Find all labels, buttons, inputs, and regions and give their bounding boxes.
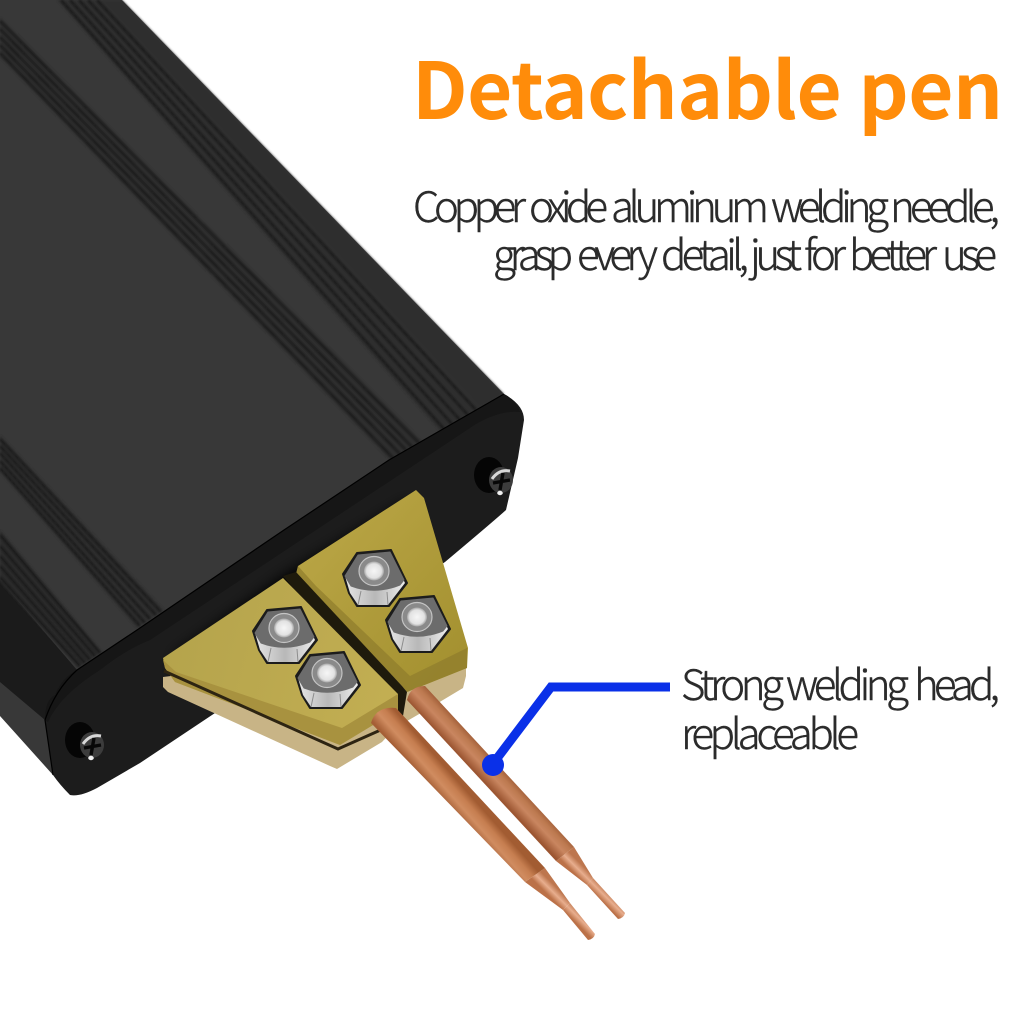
description text: welding	[771, 174, 889, 235]
description text: use	[942, 222, 997, 283]
gap between plates	[283, 572, 407, 716]
description text	[413, 174, 1000, 283]
copper welding needle right	[407, 686, 625, 919]
description text: Copper	[413, 174, 527, 235]
icon: screw left	[65, 722, 104, 760]
left brass plate	[163, 578, 398, 745]
device body: black aluminum housing	[0, 0, 524, 795]
description text: aluminum	[611, 174, 769, 235]
front end face of housing	[45, 394, 524, 795]
hex nut 1	[253, 607, 317, 663]
bevel around front face	[45, 394, 520, 722]
recess shadow above plates	[175, 500, 425, 700]
description text: better	[849, 222, 938, 283]
hex nut 3	[343, 550, 407, 606]
lower tan plates	[163, 660, 466, 769]
description text: grasp	[493, 222, 573, 283]
callout label: head,	[914, 652, 1000, 713]
welding head: brass plates	[163, 490, 468, 769]
callout leader line	[482, 687, 670, 776]
right brass plate	[296, 490, 468, 692]
callout label: welding	[786, 652, 909, 713]
top face of housing	[0, 0, 504, 775]
callout label: replaceable	[681, 701, 859, 762]
ridge bands	[0, 0, 504, 668]
description text: for	[804, 222, 847, 283]
copper welding needle left	[371, 708, 595, 940]
icon: screw right	[474, 457, 513, 495]
hex nut 4	[386, 596, 450, 652]
description text: detail,	[661, 222, 749, 283]
hex nut 2	[296, 652, 360, 708]
description text: every	[577, 222, 658, 283]
callout label	[681, 652, 1000, 762]
title: Detachable pen	[412, 30, 1003, 142]
description text: oxide	[529, 174, 608, 235]
callout label: Strong	[681, 652, 784, 713]
dark lower side shading	[0, 580, 77, 720]
description text: just	[748, 222, 802, 283]
description text: needle,	[890, 174, 1000, 235]
dark gap between brass and tan plate	[164, 671, 385, 749]
